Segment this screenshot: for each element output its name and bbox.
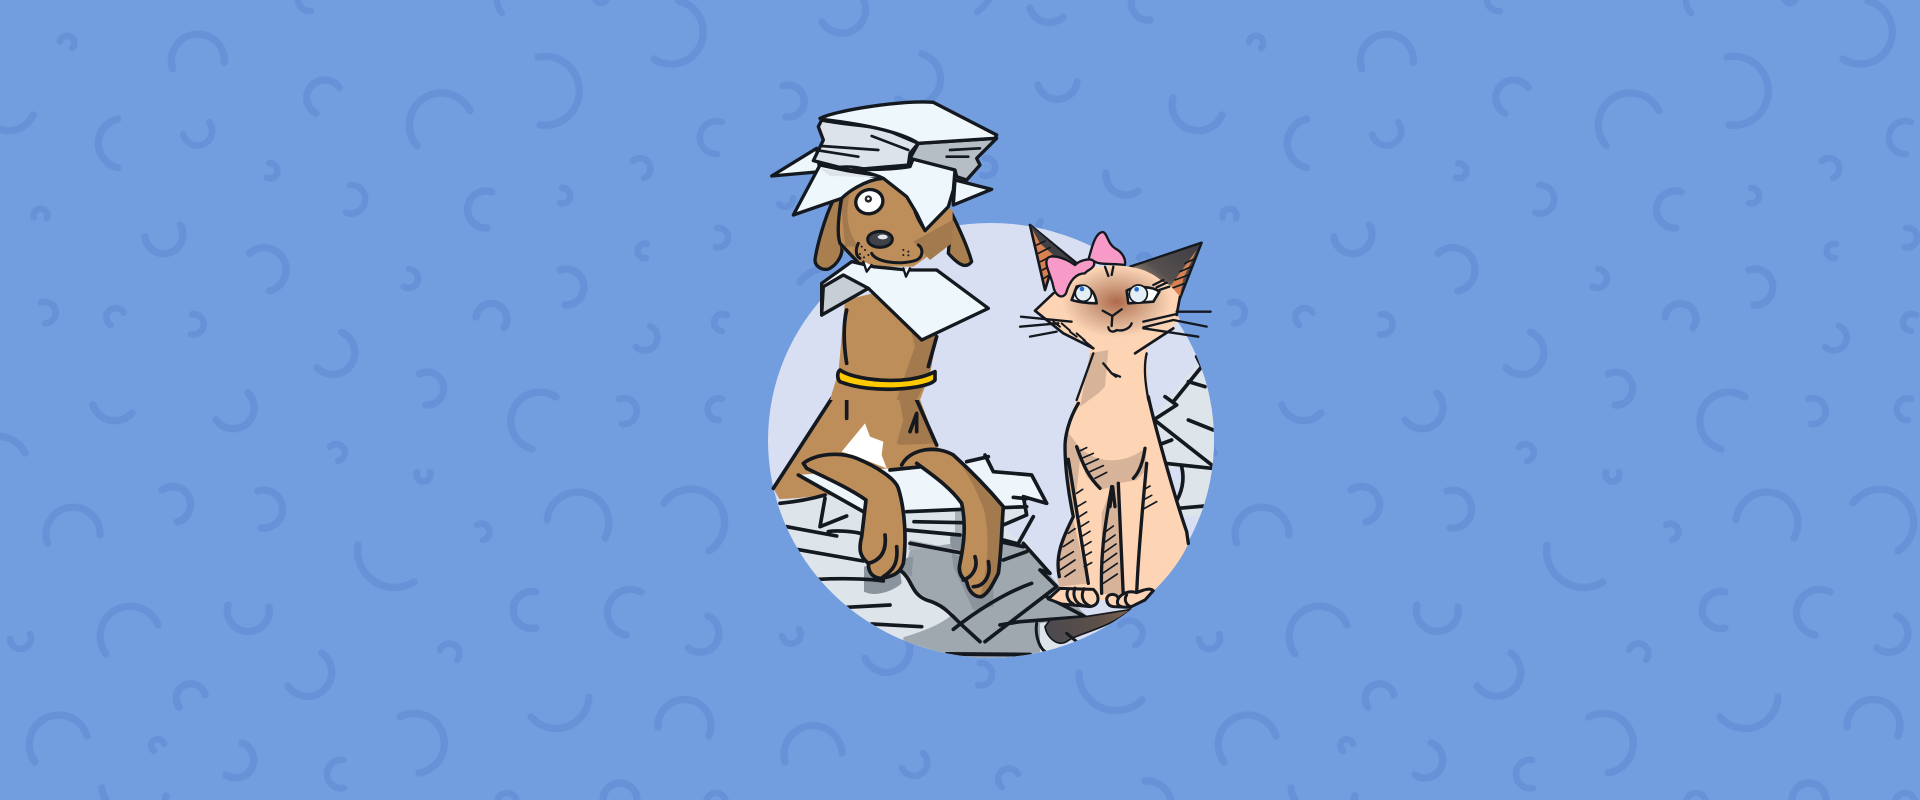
illustration [760,102,1217,667]
cat paws [1048,588,1153,607]
head paper flaps [793,165,883,215]
lavender disc [768,223,1214,658]
right ear [1130,243,1202,298]
left ear [1030,225,1077,290]
cat hatching [1060,448,1157,583]
dog paws [803,449,1003,597]
cat shading [1057,430,1147,597]
face [838,178,953,267]
back paper [772,148,992,205]
lashes, nose, mouth, whiskers [1020,267,1211,400]
ears [815,197,972,269]
paper stack [813,120,918,170]
dog body [773,367,940,500]
nose [868,231,892,247]
ground shadow under cat [1045,609,1132,643]
cat eyes [1072,286,1097,303]
cat outline and legs [1058,397,1188,597]
bow [1088,232,1125,265]
eye [853,187,886,217]
dog head [772,102,997,269]
freckles [860,247,908,257]
mouth [856,243,922,263]
grey shadow paper [903,543,1087,667]
paper outline lines [780,357,1213,655]
background arc pattern [0,0,1172,800]
top stack under paws [802,460,1043,510]
dog neck [830,293,938,400]
paper piles clipped to disc [760,357,1217,667]
face mask [1062,266,1172,338]
paw shadows [864,534,994,610]
cat body [1048,333,1188,607]
paper pile right [1199,362,1214,516]
dog collar [838,370,935,389]
paper pile left [776,498,1058,658]
paper in dog mouth [822,262,988,340]
cat head [1020,225,1211,400]
face [1035,267,1180,353]
